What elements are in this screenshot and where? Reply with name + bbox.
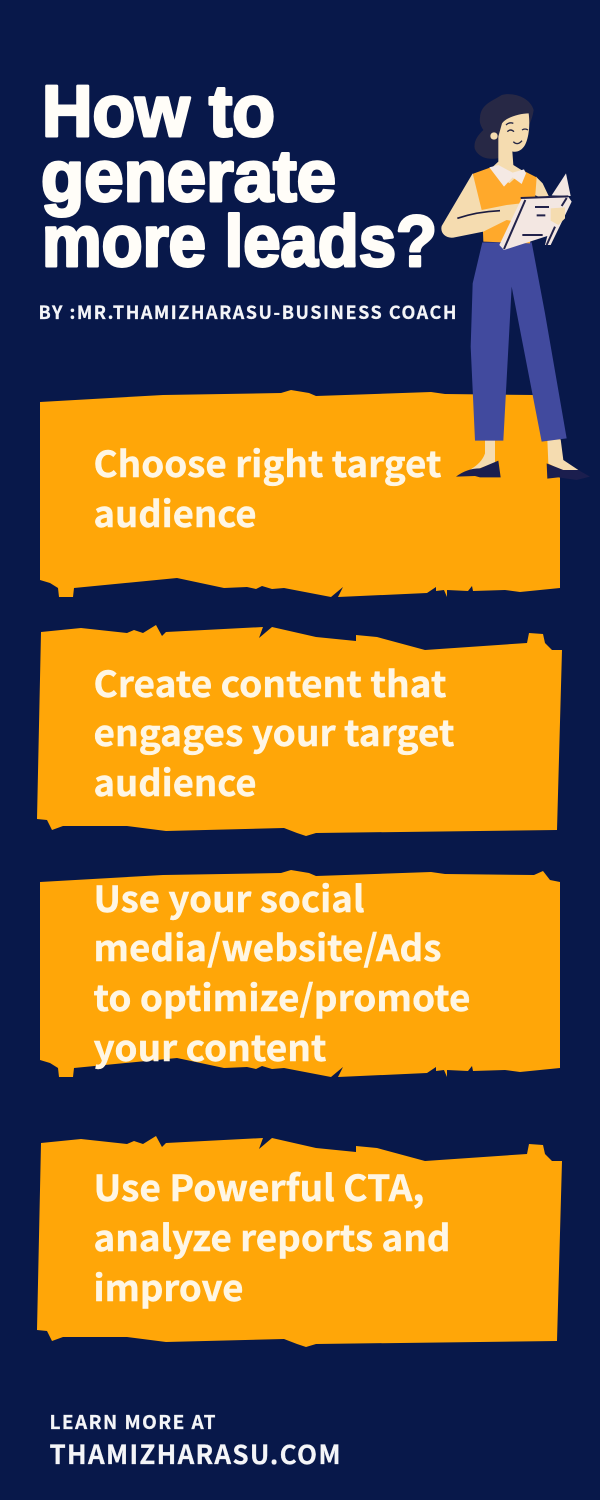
title	[41, 72, 437, 282]
footer website: THAMIZHARASU.COM	[50, 1435, 340, 1472]
step 2 text: audience	[94, 755, 256, 807]
collar	[489, 165, 526, 187]
footer label: LEARN MORE AT	[50, 1408, 216, 1435]
step 3 text: to optimize/promote	[94, 970, 470, 1022]
panel: step 4	[37, 1136, 562, 1347]
step 3 text: media/website/Ads	[94, 920, 442, 972]
step 4 text: analyze reports and	[94, 1210, 450, 1262]
figure: woman reading a book	[441, 94, 590, 480]
step 2 text: engages your target	[94, 705, 454, 757]
top	[472, 167, 537, 243]
title: How to	[42, 72, 275, 152]
facial features	[506, 123, 528, 144]
step 4 text	[94, 1160, 450, 1312]
arm	[441, 173, 525, 238]
hand	[551, 207, 565, 225]
step 1 text: Choose right target	[94, 436, 442, 488]
step 1 text: audience	[94, 486, 256, 538]
step 1 text	[94, 436, 442, 538]
trousers	[471, 242, 567, 442]
step 3 text	[94, 871, 470, 1072]
title: more leads?	[42, 202, 437, 282]
byline: BY :MR.THAMIZHARASU-BUSINESS COACH	[38, 299, 456, 325]
panel: step 3	[40, 870, 560, 1077]
panel: step 2	[37, 625, 562, 836]
step 3 text: Use your social	[94, 871, 364, 923]
step 4 text: Use Powerful CTA,	[94, 1160, 424, 1212]
right arm	[535, 177, 549, 197]
step 2 text	[94, 656, 454, 807]
shoes	[456, 461, 590, 480]
legs	[469, 439, 578, 471]
hair	[474, 94, 534, 159]
book	[499, 197, 572, 250]
step 2 text: Create content that	[94, 656, 447, 708]
ear	[490, 132, 498, 140]
step 4 text: improve	[94, 1260, 244, 1312]
title: generate	[41, 137, 336, 217]
step 3 text: your content	[94, 1020, 326, 1072]
panel: step 1	[40, 390, 560, 597]
neck and face	[490, 113, 529, 184]
